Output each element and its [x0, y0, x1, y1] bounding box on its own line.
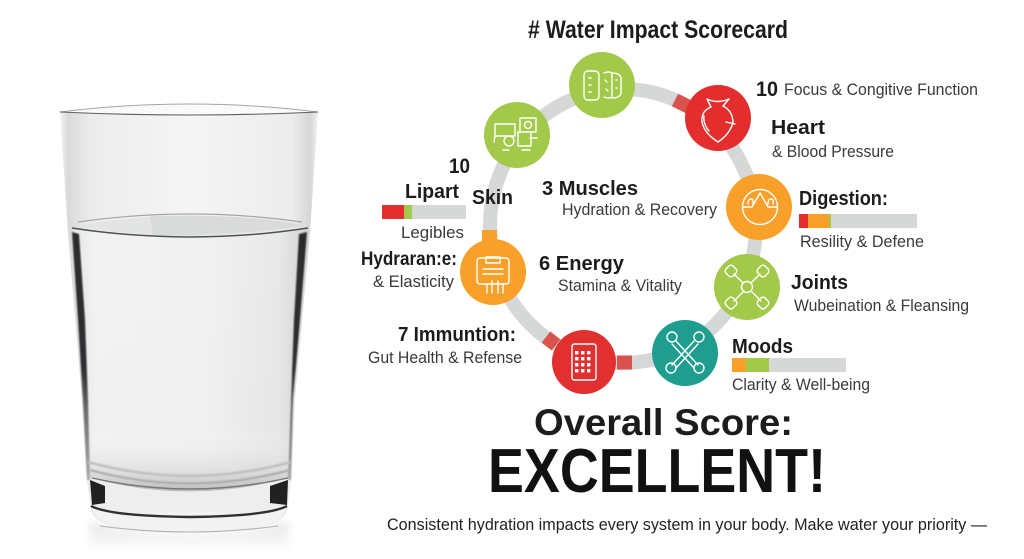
label: heart: Heart — [771, 117, 825, 139]
label: moods — [732, 336, 870, 394]
label: heart: & Blood Pressure — [772, 142, 894, 161]
label: hydration: & Elasticity — [373, 272, 454, 291]
label: muscles — [542, 178, 717, 219]
label: focus — [756, 78, 978, 101]
label: moods: Moods — [732, 336, 793, 358]
label: muscles: Hydration & Recovery — [562, 200, 717, 219]
icon: green left circle — [484, 102, 550, 168]
label: muscles: 3 Muscles — [542, 178, 638, 200]
label: focus: Focus & Congitive Function — [784, 80, 978, 99]
icon: green top circle — [569, 52, 635, 118]
water surface — [75, 216, 305, 236]
label: joints: Joints — [791, 272, 848, 294]
icon: green bones circle — [714, 254, 780, 320]
label: digestion — [799, 188, 924, 251]
footer text: Consistent hydration impacts every system in your body. Make water your priority — — [387, 515, 987, 534]
water — [73, 228, 307, 492]
water edge shading — [72, 232, 307, 480]
ring accent segments — [675, 100, 689, 107]
label: hydration: Hydraran:e: — [361, 249, 457, 270]
label: digestion: Resility & Defene — [800, 232, 924, 251]
glass shadow — [88, 522, 290, 552]
excellent heading: EXCELLENT! — [488, 437, 826, 506]
label: digestion: Digestion: — [799, 188, 888, 210]
label: lipart: 10 — [449, 155, 470, 178]
score bar: moods — [732, 358, 846, 372]
label: immunity: 7 Immuntion: — [398, 324, 516, 346]
label: moods: Clarity & Well-being — [732, 375, 870, 394]
label: heart — [771, 117, 894, 161]
label: hydration — [361, 249, 457, 291]
score bar: digestion — [799, 214, 917, 228]
icon: orange gauge circle — [726, 174, 792, 240]
score bar: lipart — [382, 205, 466, 219]
label: energy — [539, 253, 682, 295]
label: lipart: Legibles — [401, 223, 464, 242]
label: skin: Skin — [472, 187, 513, 209]
ring connector — [490, 89, 756, 363]
label: lipart — [382, 155, 470, 242]
glass of water — [60, 104, 318, 552]
label: joints — [791, 272, 969, 315]
label: joints: Wubeination & Fleansing — [794, 296, 969, 315]
thick base — [105, 486, 270, 512]
label: energy: 6 Energy — [539, 253, 625, 275]
rim — [60, 104, 318, 115]
label: lipart: Lipart — [405, 181, 459, 203]
icon: orange circle — [460, 239, 526, 305]
icon: red tablet circle — [552, 330, 616, 394]
icon: teal crossed bones circle — [652, 320, 718, 386]
label: energy: Stamina & Vitality — [558, 276, 682, 295]
icon: red heart circle — [685, 85, 751, 151]
label: focus: 10 — [756, 78, 778, 101]
label: immunity — [368, 324, 522, 367]
title: # Water Impact Scorecard — [528, 16, 788, 44]
glass upper body — [60, 112, 318, 533]
label: immunity: Gut Health & Refense — [368, 348, 522, 367]
overall score heading: Overall Score: — [534, 402, 793, 443]
base lines — [88, 462, 291, 476]
